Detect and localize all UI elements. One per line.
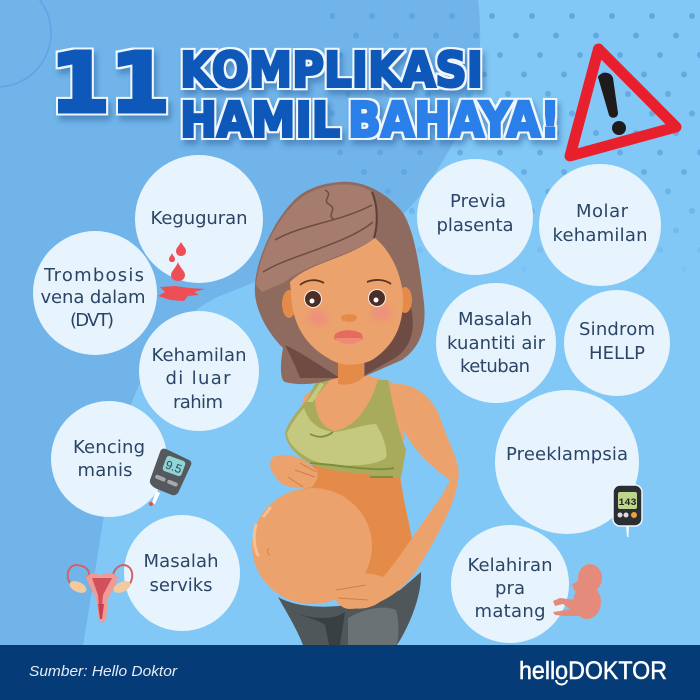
ears (282, 287, 412, 318)
hair back (255, 182, 425, 384)
bubble: Trombosis vena dalam (DVT): Trombosis (43, 265, 144, 286)
bubble: Kehamilan di luar rahim: Kehamilan (152, 345, 246, 366)
bubble: Masalah kuantiti air ketuban: Masalah (458, 309, 532, 330)
face (290, 238, 403, 365)
bubble: Keguguran (135, 155, 263, 283)
cheeks (308, 305, 391, 326)
title (50, 36, 560, 148)
bubble: Molar kehamilan: kehamilan (552, 225, 648, 246)
bubble: Kelahiran pra matang (451, 525, 569, 643)
belly (252, 488, 372, 604)
bubble: Trombosis vena dalam (DVT) (33, 231, 157, 355)
bubble: Trombosis vena dalam (DVT): (DVT) (70, 310, 114, 331)
bubble: Kehamilan di luar rahim: di luar (166, 368, 231, 389)
bubble: Kencing manis: manis (78, 460, 132, 481)
bubble: Preeklampsia: Preeklampsia (506, 444, 628, 465)
title line: HAMIL BAHAYA!: BAHAYA! (348, 92, 560, 148)
title line: KOMPLIKASI: KOMPLIKASI (180, 42, 483, 98)
bubble: Keguguran: Keguguran (150, 208, 248, 229)
title line: HAMIL BAHAYA! (180, 92, 560, 148)
bubble: Molar kehamilan (539, 164, 661, 286)
bubble: Molar kehamilan: Molar (576, 201, 629, 222)
icon: blood pressure meter 143 (613, 485, 642, 537)
icon: blood drops (158, 242, 205, 301)
bubble: Previa plasenta: Previa (450, 191, 506, 212)
icon: uterus (68, 565, 132, 622)
shoulder and chest (290, 375, 405, 440)
bubble: Kelahiran pra matang: matang (474, 601, 546, 622)
eyes (300, 280, 391, 308)
bubble: Masalah serviks (124, 515, 240, 631)
nose (341, 314, 357, 322)
source text: Sumber: Hello Doktor (29, 664, 178, 680)
icon: glucose meter 9.5: 9.5 (163, 458, 184, 476)
green top (285, 378, 406, 478)
pants (278, 572, 421, 645)
bubble: Kencing manis: Kencing (73, 437, 145, 458)
logo: hello DOKTOR: helloDOKTOR (519, 657, 667, 685)
icon: warning triangle (570, 49, 676, 156)
bubble: Previa plasenta: plasenta (436, 215, 514, 236)
bubble: Kelahiran pra matang: Kelahiran (468, 555, 552, 576)
neck (338, 352, 364, 385)
icon: fetus (553, 564, 602, 619)
bubble: Kehamilan di luar rahim: rahim (173, 392, 223, 413)
lower hand (332, 574, 389, 609)
bubble: Kencing manis (51, 401, 167, 517)
lips (334, 330, 363, 344)
bubble: Kelahiran pra matang: pra (495, 578, 525, 599)
bubble: Sindrom HELLP (564, 290, 670, 396)
bubble: Kehamilan di luar rahim (139, 311, 259, 431)
footer bar (0, 645, 700, 700)
bubble: Preeklampsia (495, 390, 639, 534)
upper hand (270, 455, 318, 488)
icon: blood pressure meter 143: 143 (618, 498, 637, 509)
title line: HAMIL BAHAYA!: HAMIL (180, 92, 340, 148)
bubble: Sindrom HELLP: Sindrom (579, 319, 655, 340)
bubble: Masalah serviks: Masalah (144, 551, 218, 572)
icon: glucose meter 9.5 (149, 449, 191, 506)
bubble: Previa plasenta (417, 159, 533, 275)
bubble: Trombosis vena dalam (DVT): vena dalam (40, 287, 146, 308)
woman figure (252, 182, 459, 645)
right arm (336, 384, 459, 609)
bubble: Masalah kuantiti air ketuban: kuantiti air (447, 333, 546, 354)
bubble: Masalah kuantiti air ketuban: ketuban (460, 356, 530, 377)
midsection (300, 465, 413, 580)
bubble: Masalah kuantiti air ketuban (436, 283, 556, 403)
hair front (256, 184, 377, 292)
title number 11: 11 (50, 36, 170, 132)
bubble: Masalah serviks: serviks (150, 575, 212, 596)
bubble: Sindrom HELLP: HELLP (589, 343, 645, 364)
